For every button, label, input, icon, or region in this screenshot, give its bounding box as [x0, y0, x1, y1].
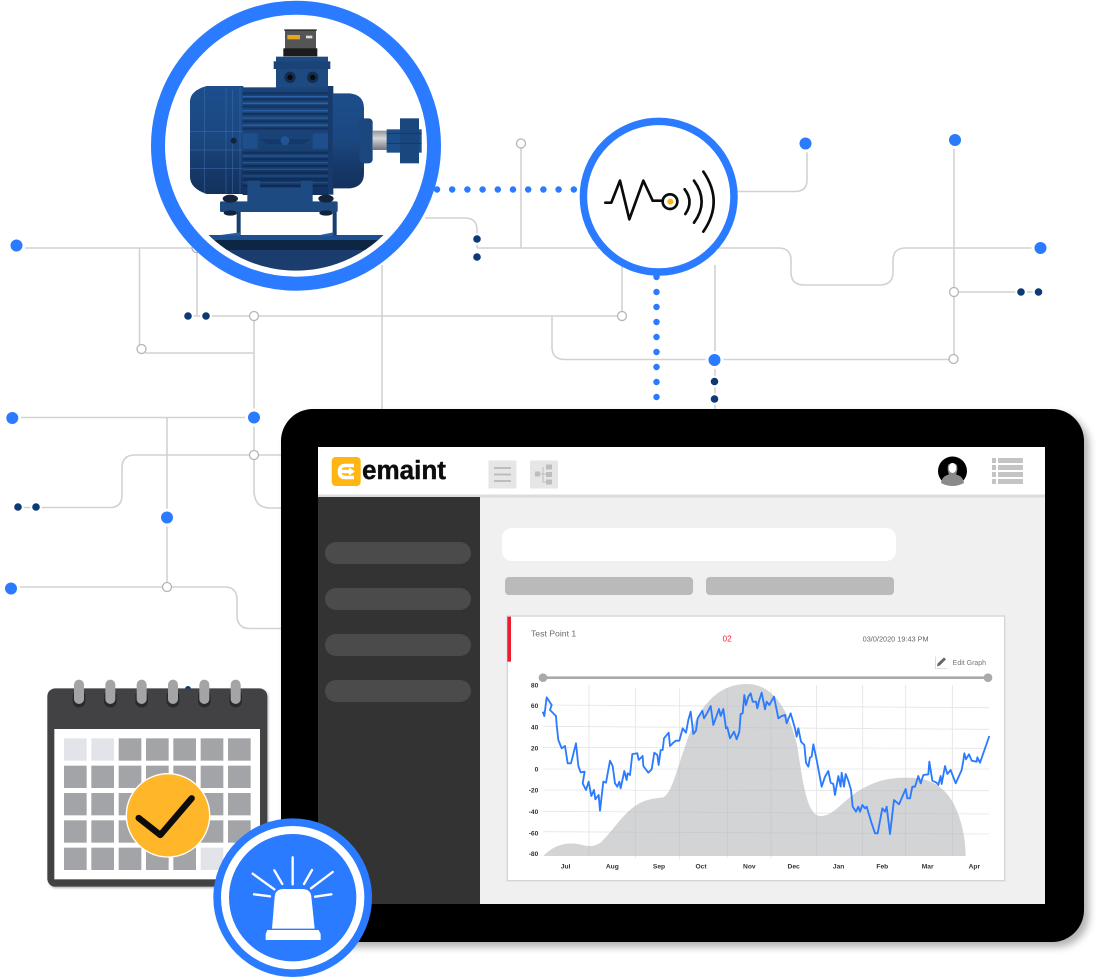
y axis labels [529, 682, 539, 858]
chart card [507, 616, 1005, 881]
x axis labels: Feb [876, 864, 888, 871]
x axis labels: Jul [561, 864, 571, 871]
x axis labels: Mar [922, 864, 934, 871]
x axis labels: Nov [743, 864, 756, 871]
x axis labels: Oct [695, 864, 707, 871]
calendar page [54, 729, 260, 879]
filter pills [505, 577, 894, 595]
y axis labels: 80 [531, 682, 539, 689]
wire junction dots [4, 132, 1048, 693]
y axis labels: 20 [531, 746, 539, 753]
y axis labels: -60 [529, 830, 539, 837]
search field [502, 528, 896, 561]
sensor badge [583, 121, 734, 272]
status value: 02 [723, 635, 732, 644]
y axis labels: -80 [529, 851, 539, 858]
y axis labels: 60 [531, 703, 539, 710]
x axis labels: Apr [969, 864, 980, 871]
icon: electric motor [190, 29, 422, 275]
timestamp: 03/0/2020 19:43 PM [863, 635, 929, 644]
x axis labels: Aug [606, 864, 619, 871]
icon: siren [253, 857, 333, 940]
sidebar [318, 497, 480, 904]
icon: tree button [530, 460, 558, 488]
y axis labels: -40 [529, 809, 539, 816]
alert badge [213, 818, 372, 977]
calendar rings [73, 680, 242, 707]
app header [318, 447, 1045, 498]
edit graph action: Edit Graph [953, 660, 986, 667]
calendar [47, 680, 267, 887]
area and line chart [529, 673, 992, 871]
emaint logo [332, 457, 447, 486]
tablet [281, 409, 1084, 942]
range slider [539, 673, 992, 682]
y axis labels: -20 [529, 787, 539, 794]
icon: check badge [126, 774, 210, 857]
open nodes [137, 139, 958, 592]
trend line [543, 693, 989, 834]
edit graph action [935, 657, 986, 669]
navy nodes [13, 234, 1043, 693]
motor badge [158, 8, 434, 284]
icon: menu button [488, 460, 516, 488]
x axis labels: Jan [833, 864, 844, 871]
y axis labels: 40 [531, 724, 539, 731]
icon: list button [992, 458, 1023, 484]
x axis labels [561, 864, 980, 871]
icon: user avatar [938, 456, 967, 486]
dotted connector: motor to sensor [437, 186, 576, 193]
card title: Test Point 1 [531, 628, 576, 638]
icon: vibration sensor [605, 172, 714, 232]
x axis labels: Sep [653, 864, 665, 871]
y axis labels: 0 [535, 767, 539, 774]
emaint logo: emaint [362, 457, 447, 485]
calendar grid [64, 738, 251, 870]
x axis labels: Dec [788, 864, 800, 871]
large blue nodes [4, 132, 1048, 596]
dotted connector: sensor to tablet [653, 277, 660, 412]
circuit wires [11, 140, 1040, 628]
tablet screen background [318, 447, 1045, 904]
